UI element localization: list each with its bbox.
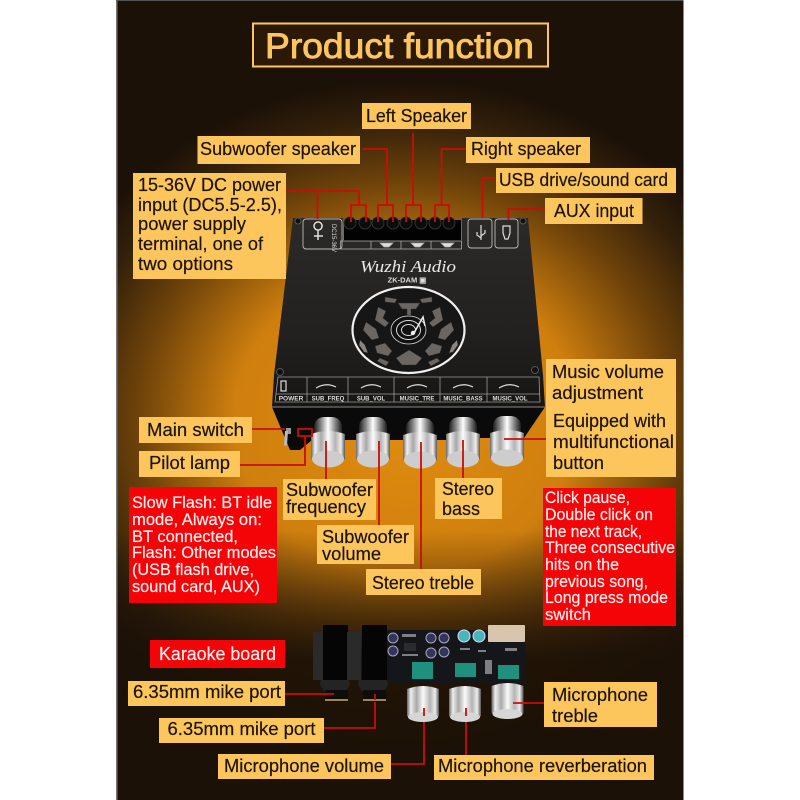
callout: button functions: Double click on xyxy=(545,506,653,524)
callout: button functions: the next track, xyxy=(545,523,642,541)
control legend strip xyxy=(275,377,540,402)
label: music volume: adjustment xyxy=(552,383,643,403)
control legend strip: SUB_VOL xyxy=(357,396,386,402)
callout: button functions: Three consecutive xyxy=(545,539,675,557)
callout: button functions: switch xyxy=(545,606,591,624)
control legend strip: POWER xyxy=(279,396,304,402)
amplifier front face xyxy=(272,407,545,450)
label: microphone reverberation: Microphone reverberation xyxy=(438,756,647,776)
screw holes xyxy=(276,218,538,376)
label: subwoofer volume: volume xyxy=(322,544,381,564)
model name: ZK-DAM ▣ xyxy=(388,276,426,284)
knobs xyxy=(311,416,524,468)
label: subwoofer frequency xyxy=(283,479,376,520)
callout: pilot lamp modes: Slow Flash: BT idle xyxy=(132,494,272,512)
label: stereo bass: bass xyxy=(442,499,480,519)
label: stereo bass xyxy=(435,478,502,519)
connector xyxy=(488,625,525,642)
AUX socket xyxy=(495,219,518,248)
label: music volume xyxy=(546,359,676,477)
callout: button functions: hits on the xyxy=(545,556,619,574)
karaoke board xyxy=(313,625,525,722)
label: music volume: button xyxy=(553,453,604,473)
label: mike port 1: 6.35mm mike port xyxy=(133,682,281,702)
callout: button functions: previous song, xyxy=(545,573,648,591)
label: AUX input xyxy=(545,198,642,224)
callout: button functions xyxy=(543,488,676,626)
label: right speaker xyxy=(466,137,590,163)
title: Product function xyxy=(265,27,534,66)
label: main switch xyxy=(139,417,252,443)
control legend strip: MUSIC_TRE xyxy=(400,396,434,402)
label: karaoke board: Karaoke board xyxy=(159,644,276,664)
amplifier board xyxy=(272,217,545,468)
label: microphone volume: Microphone volume xyxy=(224,756,384,776)
label: subwoofer frequency: Subwoofer xyxy=(286,480,373,500)
label: subwoofer volume: Subwoofer xyxy=(322,527,409,547)
callout: button functions: Long press mode xyxy=(545,589,668,607)
label: DC power input: 15-36V DC power xyxy=(138,175,281,195)
control legend strip: MUSIC_VOL xyxy=(492,396,528,402)
callout: button functions: Click pause, xyxy=(545,489,630,507)
DC power socket: DC15-36V xyxy=(330,224,336,252)
brand logo: Wuzhi Audio xyxy=(360,257,456,276)
label: AUX input: AUX input xyxy=(554,201,634,221)
callout: pilot lamp modes: Flash: Other modes xyxy=(132,544,276,562)
leader lines: red connectors xyxy=(240,133,546,764)
label: music volume: multifunctional xyxy=(553,432,674,452)
callout: pilot lamp modes: mode, Always on: xyxy=(132,511,262,529)
label: mike port 2 xyxy=(159,718,324,743)
label: subwoofer speaker xyxy=(198,136,360,164)
callout: pilot lamp modes xyxy=(129,487,277,603)
background panel xyxy=(116,0,684,800)
PCB components xyxy=(402,634,517,674)
label: USB drive: USB drive/sound card xyxy=(499,170,668,190)
PCB xyxy=(375,630,525,683)
label: subwoofer speaker: Subwoofer speaker xyxy=(200,139,356,159)
label: DC power input: input (DC5.5-2.5), xyxy=(138,195,282,215)
amplifier top plate xyxy=(272,218,545,407)
label: subwoofer volume xyxy=(317,525,414,564)
label: main switch: Main switch xyxy=(147,420,244,440)
label: music volume: Music volume xyxy=(552,362,664,382)
callout: pilot lamp modes: (USB flash drive, xyxy=(132,561,254,579)
label: karaoke board xyxy=(150,640,285,668)
label: DC power input xyxy=(133,173,286,279)
label: DC power input: two options xyxy=(138,254,233,274)
label: stereo treble xyxy=(366,569,481,595)
callout: pilot lamp modes: sound card, AUX) xyxy=(132,578,260,596)
label: pilot lamp: Pilot lamp xyxy=(149,453,230,473)
label: DC power input: power supply xyxy=(138,214,246,234)
label: microphone treble: treble xyxy=(552,706,598,726)
terminal strip xyxy=(340,241,462,249)
capacitors xyxy=(388,633,449,658)
callout: pilot lamp modes: BT connected, xyxy=(132,528,238,546)
label: microphone treble xyxy=(544,682,657,727)
leader lines over knobs xyxy=(324,694,527,716)
control legend strip: SUB_FREQ xyxy=(312,396,345,402)
label: microphone treble: Microphone xyxy=(552,685,648,705)
mic jack right xyxy=(347,625,388,702)
label: mike port 2: 6.35mm mike port xyxy=(168,719,316,739)
mic jack left xyxy=(313,625,350,702)
label: left speaker: Left Speaker xyxy=(366,106,467,126)
label: music volume: Equipped with xyxy=(553,411,666,431)
USB socket xyxy=(468,219,492,248)
label: right speaker: Right speaker xyxy=(471,139,581,159)
label: pilot lamp xyxy=(139,451,240,477)
fan grille xyxy=(352,287,464,373)
label: stereo bass: Stereo xyxy=(442,479,494,499)
toggle switch xyxy=(284,428,291,446)
label: subwoofer frequency: frequency xyxy=(286,497,366,517)
DC power socket xyxy=(303,219,342,252)
terminal block xyxy=(344,217,461,241)
microphone knobs xyxy=(407,683,524,722)
control legend strip: MUSIC_BASS xyxy=(443,396,483,402)
label: stereo treble: Stereo treble xyxy=(372,573,474,593)
label: DC power input: terminal, one of xyxy=(138,234,264,254)
potentiometers xyxy=(412,662,519,679)
